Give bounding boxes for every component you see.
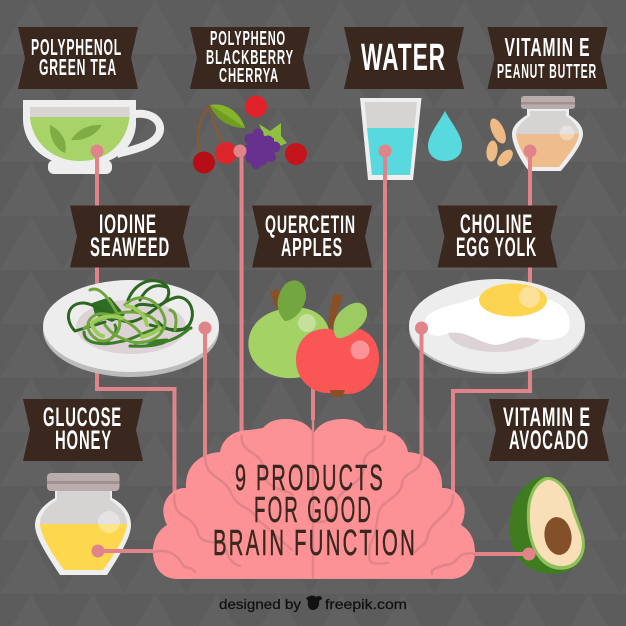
icon: apples: [248, 280, 379, 397]
brain title: FOR GOOD: [254, 489, 373, 530]
connector: avocado: [475, 552, 529, 556]
brain: [153, 419, 475, 579]
brain title: [213, 457, 417, 563]
banner: polypheno blackberry cherrya: CHERRYA: [219, 65, 279, 87]
banner: polypheno blackberry cherrya: [190, 27, 310, 89]
banner: quercetin apples: [252, 206, 372, 268]
brain right hemisphere: [313, 419, 475, 579]
banner: polyphenol green tea: [18, 27, 138, 89]
footer credit: [219, 596, 407, 612]
footer credit: freepik.com: [325, 596, 407, 612]
banner: polypheno blackberry cherrya: POLYPHENO: [210, 28, 286, 50]
banner: iodine seaweed: SEAWEED: [90, 232, 170, 262]
connector lines: [97, 149, 530, 495]
brain title: BRAIN FUNCTION: [213, 522, 417, 563]
icon: egg plate: [409, 279, 585, 374]
brain title: 9 PRODUCTS: [235, 457, 385, 498]
banner: choline egg yolk: [438, 206, 558, 268]
icon: seaweed plate: [43, 280, 219, 377]
banner: glucose honey: [23, 399, 143, 461]
banner: polyphenol green tea: POLYPHENOL: [31, 34, 122, 60]
icon: glass of water: [360, 98, 422, 180]
banner: choline egg yolk: CHOLINE: [460, 209, 533, 239]
banner: polyphenol green tea: GREEN TEA: [39, 54, 117, 80]
banner: iodine seaweed: IODINE: [99, 209, 157, 239]
icon: peanut butter jar: [512, 96, 583, 171]
banner: quercetin apples: QUERCETIN: [265, 211, 356, 239]
connector: honey: [98, 549, 153, 553]
banner: quercetin apples: APPLES: [281, 232, 343, 262]
connectors from plates: [205, 328, 422, 456]
icon: honey jar: [35, 473, 131, 575]
icon: almonds: [485, 116, 516, 169]
banner: choline egg yolk: EGG YOLK: [456, 232, 537, 262]
banner: vitamin e avocado: [489, 399, 609, 461]
icon: water drop: [428, 111, 462, 161]
icon: berries: [193, 96, 307, 174]
icon: freepik logo: [306, 596, 322, 610]
icon: avocado: [510, 476, 585, 574]
banner: vitamin e peanut butter: [488, 27, 608, 89]
footer credit: designed by: [219, 596, 301, 612]
banner: water: [344, 27, 464, 89]
banner: iodine seaweed: [70, 206, 190, 268]
banner: polypheno blackberry cherrya: BLACKBERRY: [206, 47, 294, 69]
connector dots: [90, 144, 536, 560]
banner: glucose honey: HONEY: [55, 425, 112, 455]
banner: water: WATER: [361, 37, 446, 79]
banner: glucose honey: GLUCOSE: [43, 402, 122, 432]
icon: green tea cup: [23, 100, 160, 174]
brain left hemisphere: [153, 419, 314, 579]
brain folds: [153, 420, 475, 578]
